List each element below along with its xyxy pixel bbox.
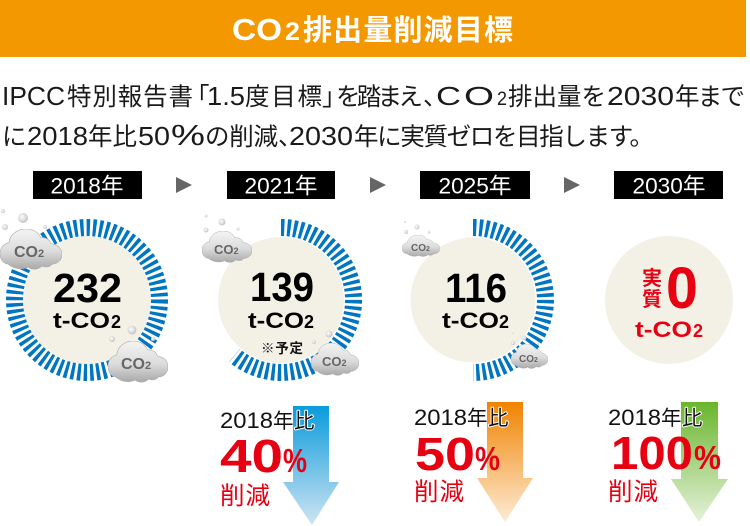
intro text: % [171, 120, 205, 152]
cloud top left: CO2 [214, 242, 239, 257]
label 2025 [420, 171, 530, 199]
intro text: 度目標 [245, 83, 322, 111]
intro text: C [436, 81, 461, 111]
intro text [2, 81, 745, 152]
intro text: の削減 [205, 123, 278, 151]
panel: 100% reduction: 比 [682, 407, 702, 430]
panel: 2025 circle: 116 [445, 265, 507, 311]
intro text: 、 [278, 124, 302, 151]
down arrow green [671, 402, 728, 522]
intro text: IPCC [2, 81, 65, 111]
cloud bottom right [311, 327, 359, 375]
panel: 2030 circle: 質 [642, 288, 662, 311]
panel: 100% reduction: 削減 [608, 478, 658, 506]
intro text: 2030 [607, 81, 674, 111]
panel: 40% reduction: % [283, 442, 307, 479]
panel: 40% reduction [220, 406, 339, 525]
cloud bottom right: CO2 [519, 354, 538, 365]
panel: 2021 circle: t-CO [248, 308, 304, 333]
label 2021: 2021年 [244, 174, 318, 198]
label 2030 [614, 171, 723, 199]
cloud top left [202, 214, 252, 262]
title bar: CO [232, 12, 282, 47]
intro text: 2 [497, 89, 507, 110]
panel: 100% reduction [608, 402, 728, 522]
panel: 2025 circle: 2 [499, 312, 509, 332]
panel: 50% reduction: 2018 [414, 405, 467, 430]
intro text: 年に実質ゼロを目指します。 [354, 123, 654, 151]
label 2030: 2030年 [632, 174, 706, 198]
panel: 2018 circle: t-CO [53, 308, 110, 333]
panel: 50% reduction: 50 [415, 428, 475, 480]
panel: 2021 circle [202, 214, 359, 375]
panel: 2030 circle: 実 [642, 267, 662, 290]
cloud top left [402, 221, 440, 257]
down arrow blue [283, 406, 339, 525]
intro text: 「 [185, 83, 210, 111]
arrow 1 [176, 177, 192, 193]
cloud top left [0, 209, 62, 269]
panel: 2030 circle [605, 236, 733, 364]
down arrow orange [477, 402, 533, 522]
note: planned: ※予定 [261, 341, 304, 356]
panel: 100% reduction: 2018 [608, 405, 661, 430]
intro text: O [464, 81, 494, 111]
panel: 50% reduction [414, 402, 533, 522]
title bar: 2 [285, 18, 300, 46]
intro text: 2030 [289, 121, 353, 151]
panel: 2021 circle: 2 [304, 312, 314, 332]
cloud top left: CO2 [411, 243, 430, 254]
intro text: 排出量を [508, 83, 606, 111]
panel: 50% reduction: 比 [488, 407, 508, 430]
label 2018 [33, 171, 142, 199]
intro text: 年まで [675, 83, 745, 111]
panel: 2030 circle: 0 [666, 256, 698, 321]
panel: 2025 circle: t-CO [442, 308, 499, 333]
intro text: 、 [423, 84, 448, 111]
panel: 40% reduction: 2018 [220, 408, 273, 433]
intro text: 2018 [27, 121, 88, 151]
cloud bottom right [511, 332, 548, 368]
intro text: を踏まえ [336, 83, 423, 111]
arrow 2 [370, 177, 386, 193]
panel: 50% reduction: 削減 [414, 478, 464, 506]
panel: 40% reduction: 40 [220, 430, 283, 482]
title bar [0, 0, 746, 57]
intro text: 50 [138, 121, 170, 151]
label 2021 [227, 171, 335, 199]
panel: 2025 circle [402, 221, 548, 372]
panel: 2018 circle [0, 209, 168, 382]
label 2025: 2025年 [438, 174, 512, 198]
panel: 2030 circle: t-CO [635, 317, 692, 342]
cloud top left: CO2 [14, 244, 44, 261]
cloud bottom right [108, 320, 168, 382]
label 2018: 2018年 [50, 174, 124, 198]
panel: 2021 circle: 139 [250, 264, 314, 310]
panel: 2018 circle: 2 [111, 312, 121, 332]
panel: 100% reduction: % [694, 439, 721, 476]
intro text: 特別報告書 [67, 83, 193, 111]
panel: 50% reduction: % [475, 440, 500, 477]
panel: 40% reduction: 削減 [220, 482, 270, 510]
panel: 40% reduction: 比 [294, 410, 314, 433]
panel: 100% reduction: 100 [611, 427, 693, 479]
panel: 50% reduction: 年 [467, 407, 488, 430]
intro text: 1.5 [207, 81, 245, 111]
panel: 2018 circle: 232 [53, 265, 122, 311]
panel: 100% reduction: 年 [661, 407, 682, 430]
cloud bottom right: CO2 [322, 354, 347, 369]
intro text: に [2, 124, 26, 151]
panel: 40% reduction: 年 [273, 410, 294, 433]
intro text: 年比 [88, 123, 137, 151]
intro text: 」 [322, 84, 346, 111]
title bar: 排出量削減目標 [303, 14, 513, 47]
cloud bottom right: CO2 [121, 356, 151, 373]
panel: 2030 circle: 2 [693, 321, 703, 341]
arrow 3 [564, 177, 580, 193]
year labels and arrows [33, 171, 723, 199]
